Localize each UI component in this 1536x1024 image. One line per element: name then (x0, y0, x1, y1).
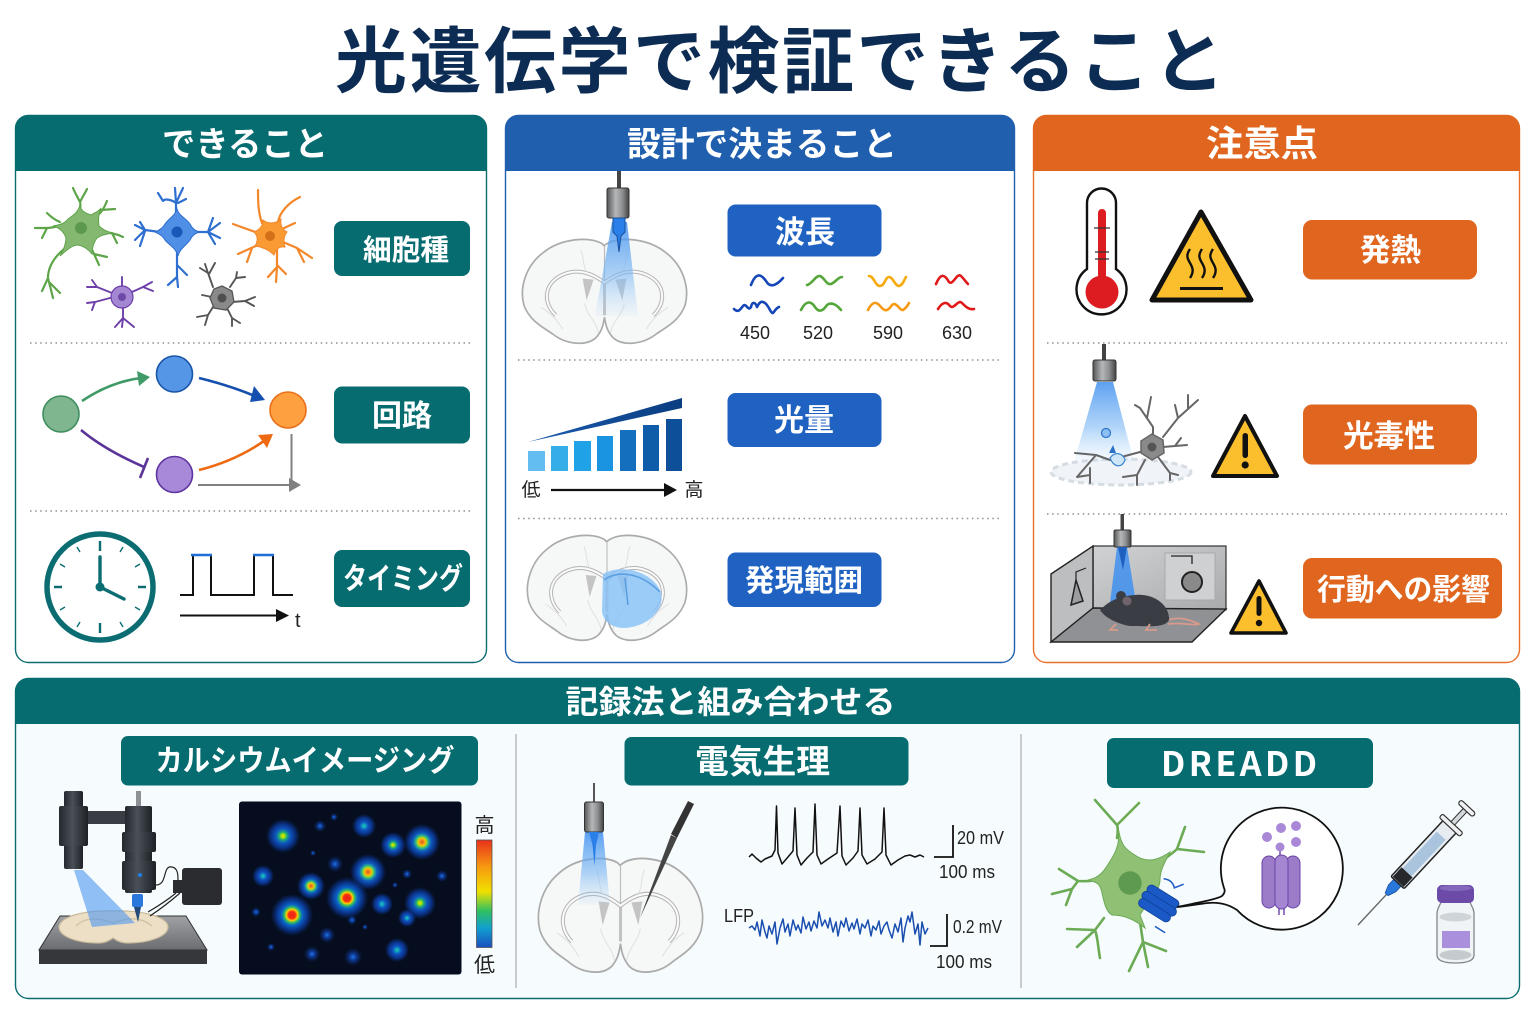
chart: spike trace (749, 804, 1004, 882)
inhibition: green to purple (81, 430, 148, 478)
header: できること: できること (162, 126, 328, 164)
pill: 光量 (728, 393, 882, 447)
pill: タイミング (334, 550, 470, 607)
callout: receptor bubble (1177, 808, 1343, 930)
icon: thermometer (1076, 188, 1126, 314)
neuron: purple (87, 277, 153, 327)
pill: 回路 (334, 386, 470, 444)
pill: 波長: 波長 (775, 215, 835, 250)
icon: vial (1437, 885, 1474, 963)
neuron: blue (135, 188, 220, 287)
chart: LFP trace (724, 906, 1002, 972)
title: 光遺伝学で検証できること (335, 23, 1225, 103)
arrow: purple to orange (199, 434, 273, 470)
chart: LFP trace: LFP (724, 906, 754, 926)
chart: spike trace: 100 ms (939, 862, 995, 882)
pill: タイミング: タイミング (343, 563, 463, 596)
chart: wavelength waves: 590 (873, 323, 903, 343)
arrow: gray feedback (198, 434, 301, 492)
pill: 光量: 光量 (774, 403, 834, 438)
header: 設計で決まること (505, 115, 1015, 171)
pill: 波長 (728, 204, 882, 256)
legend: color scale (474, 814, 495, 977)
diagram: circuit (43, 356, 306, 492)
illustration: behavior box with mouse (1051, 514, 1226, 642)
illustration: fiber over brain (522, 171, 687, 343)
node: green (43, 396, 79, 432)
pill: 発熱 (1303, 220, 1477, 280)
icon: neurons of different cell types (35, 188, 312, 327)
icon: clock (47, 534, 153, 640)
panel: 設計で決まること (505, 115, 1015, 662)
chart: spike trace: 20 mV (957, 828, 1004, 848)
header: 設計で決まること: 設計で決まること (627, 126, 897, 164)
neuron: orange (233, 190, 312, 282)
illustration: phototoxicity (1051, 344, 1198, 485)
pill: 発現範囲 (728, 552, 882, 607)
pill: DREADD (1107, 737, 1373, 788)
pill: DREADD: DREADD (1161, 737, 1317, 786)
panel: 注意点 (1033, 115, 1520, 662)
chart: wavelength waves: 630 (942, 323, 972, 343)
node: orange (270, 392, 306, 428)
icon: heat warning (1152, 212, 1251, 300)
pill: 光毒性: 光毒性 (1343, 419, 1435, 454)
arrow: blue to orange (199, 378, 265, 402)
header: 記録法と組み合わせる: 記録法と組み合わせる (566, 684, 896, 720)
chart: calcium imaging heat map (239, 802, 462, 974)
panel: 記録法と組み合わせる (15, 678, 1520, 998)
chart: LFP trace: 100 ms (936, 952, 992, 972)
node: purple (156, 456, 192, 492)
header: 注意点: 注意点 (1206, 123, 1318, 164)
neuron: gray (197, 263, 255, 326)
icon: warning (1231, 581, 1286, 633)
illustration: brain with fiber and electrode (538, 783, 703, 972)
chart: wavelength waves (734, 275, 974, 343)
mouse (1100, 591, 1199, 630)
pill: 行動への影響 (1303, 558, 1502, 618)
header: 注意点 (1033, 115, 1520, 171)
pill: 行動への影響: 行動への影響 (1317, 574, 1490, 607)
illustration: microscope (39, 791, 222, 964)
pill: 回路: 回路 (372, 400, 432, 433)
pill: 発熱: 発熱 (1360, 233, 1421, 268)
chart: LFP trace: 0.2 mV (953, 917, 1002, 937)
chart: wavelength waves: 450 (740, 323, 770, 343)
chart: light intensity bars (521, 398, 704, 501)
header: 記録法と組み合わせる (15, 678, 1520, 724)
icon: warning (1213, 416, 1277, 476)
chart: light intensity bars: 高 (684, 479, 704, 501)
legend: color scale: 高 (474, 814, 494, 837)
chart: light intensity bars: 低 (521, 479, 541, 501)
pill: カルシウムイメージング: カルシウムイメージング (156, 745, 454, 778)
header: できること (15, 115, 487, 171)
panel: できること (15, 115, 487, 662)
pill: 細胞種: 細胞種 (363, 234, 449, 267)
chart: light pulse timing: t (295, 610, 301, 632)
pill: カルシウムイメージング (121, 736, 478, 786)
neuron: green (35, 188, 123, 298)
icon: syringe (1348, 797, 1479, 935)
pill: 細胞種 (334, 221, 470, 276)
node: blue (156, 356, 192, 392)
pill: 電気生理: 電気生理 (695, 743, 830, 780)
illustration: brain with expression area (527, 535, 687, 640)
pill: 光毒性 (1303, 404, 1477, 464)
chart: wavelength waves: 520 (803, 323, 833, 343)
legend: color scale: 低 (474, 954, 495, 977)
chart: light pulse timing (180, 555, 301, 632)
illustration: DREADD neuron (1052, 800, 1204, 971)
arrow: green to blue (82, 371, 150, 401)
pill: 発現範囲: 発現範囲 (745, 565, 863, 598)
pill: 電気生理 (624, 737, 908, 786)
receptor (1131, 868, 1192, 933)
